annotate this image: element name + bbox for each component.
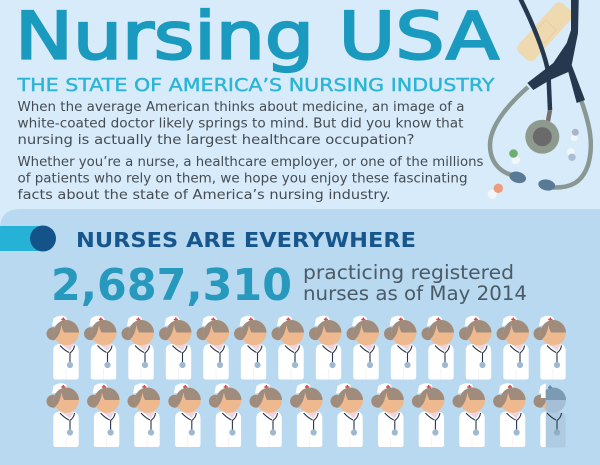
number caption (303, 261, 527, 305)
nurse (87, 383, 120, 447)
nurse (209, 383, 241, 447)
nurse (234, 316, 266, 380)
nurse (122, 316, 154, 380)
nurse (384, 316, 416, 380)
nurse (168, 383, 201, 447)
nurse (412, 383, 444, 447)
nurse (371, 383, 404, 447)
icon: bandage (515, 0, 575, 64)
nurse (496, 316, 529, 380)
nurse (422, 316, 454, 380)
nurse (46, 383, 79, 447)
nurse (330, 383, 363, 447)
nurse row 1 (46, 316, 566, 380)
intro text block (18, 99, 484, 203)
subtitle: THE STATE OF AMERICA’S NURSING INDUSTRY (16, 76, 495, 96)
icon: grey pill (571, 129, 579, 141)
nurse (84, 316, 116, 380)
nurse (128, 383, 160, 447)
icon: orange pill (488, 184, 503, 199)
intro text block: nursing is actually the largest healthcare occupation? (18, 132, 414, 148)
nurse row 2 (46, 380, 576, 450)
nurse (452, 383, 485, 447)
number caption: practicing registered (303, 261, 514, 284)
panel: nurses are everywhere (0, 209, 600, 465)
nurse (159, 316, 192, 380)
section marker (0, 226, 56, 252)
icon: green pill (509, 149, 520, 164)
nurse (346, 316, 379, 380)
nurse (290, 383, 323, 447)
intro text block: of patients who rely on them, we hope you enjoy these fascinating (18, 170, 468, 186)
illustration: stethoscope with bandage and pills (488, 0, 591, 199)
nurse (46, 316, 79, 380)
intro text block: Whether you’re a nurse, a healthcare employer, or one of the millions (18, 154, 484, 170)
section heading: NURSES ARE EVERYWHERE (76, 228, 416, 252)
icon: blue pill (567, 148, 576, 161)
nurse: partially shaded (534, 384, 566, 448)
nurse (459, 316, 492, 380)
nurse (196, 316, 229, 380)
intro text block: white-coated doctor likely springs to mind. But did you know that (18, 116, 463, 132)
intro text block: facts about the state of America’s nursing industry. (18, 187, 390, 203)
nurse (309, 316, 342, 380)
number caption: nurses as of May 2014 (303, 282, 527, 305)
nurse (272, 316, 304, 380)
nurse (250, 383, 282, 447)
icon: stethoscope (490, 0, 591, 192)
nurse (493, 383, 526, 447)
big number: 2,687,310 (51, 260, 292, 311)
nurse (534, 316, 566, 380)
intro text block: When the average American thinks about medicine, an image of a (18, 99, 464, 115)
title: Nursing USA (15, 0, 499, 74)
